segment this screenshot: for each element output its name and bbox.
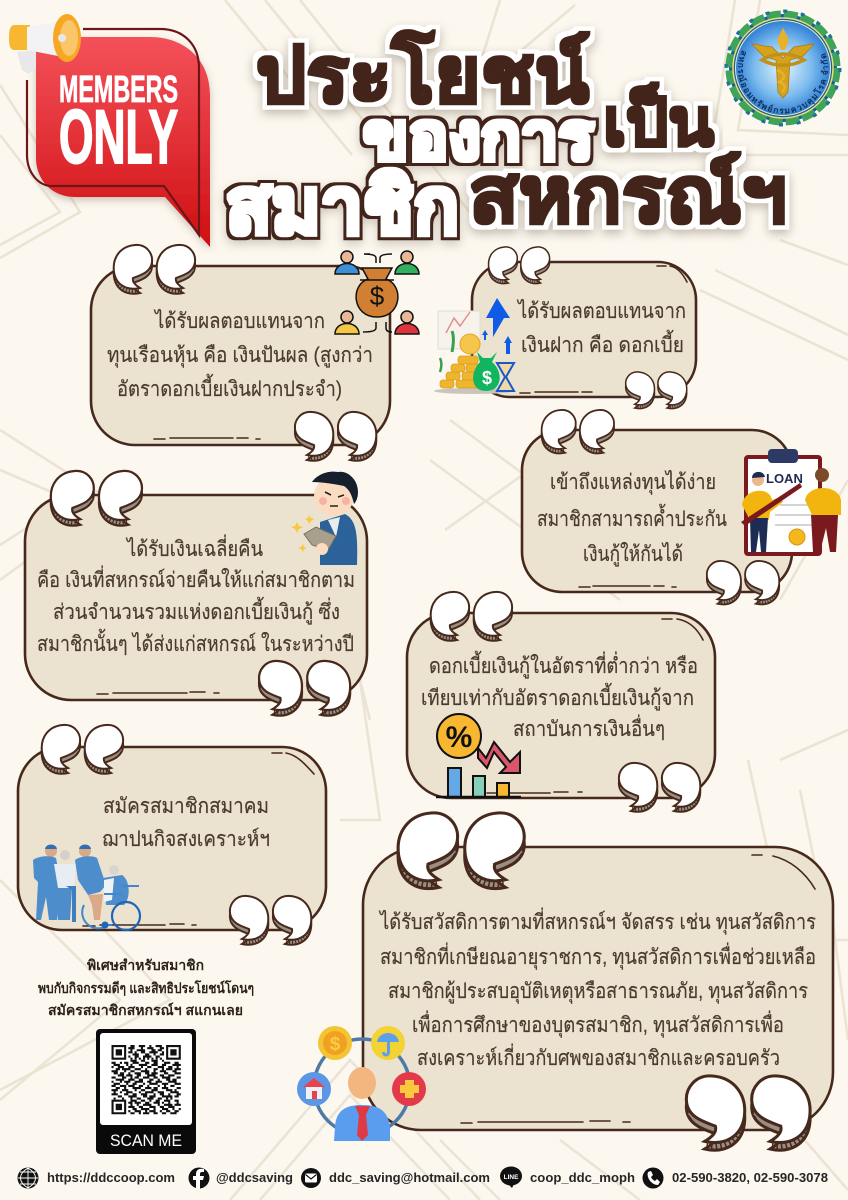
text — [537, 470, 727, 567]
panel: funeral welfare association — [18, 725, 326, 945]
badge: members only: ONLY — [59, 95, 178, 180]
quote open — [542, 410, 614, 453]
website: https://ddccoop.com — [47, 1170, 175, 1185]
icon: money bag with people — [335, 251, 419, 334]
text: member invitation: สมัครสมาชิกสหกรณ์ฯ สแกนเลย — [48, 1002, 243, 1018]
panel: lower loan interest — [407, 592, 715, 812]
footer: contact bar — [18, 1166, 828, 1189]
icon: man with money — [291, 472, 358, 565]
panel: deposit interest — [434, 247, 696, 409]
quote close — [686, 1076, 810, 1150]
text: ได้รับผลตอบแทนจาก — [516, 299, 686, 323]
text: ส่วนจำนวนรวมแห่งดอกเบี้ยเงินกู้ ซึ่ง — [53, 597, 340, 625]
icon: globe — [18, 1168, 38, 1188]
text — [107, 309, 373, 401]
logo: cooperative seal: สหกรณ์ออมทรัพย์กรมควบคุมโรค จำกัด — [738, 50, 828, 114]
icon: line — [500, 1166, 522, 1188]
text: ทุนเรือนหุ้น คือ เงินปันผล (สูงกว่า — [107, 344, 373, 368]
text: member invitation: พบกับกิจกรรมดีๆ และสิทธิประโยชน์โดนๆ — [38, 979, 254, 996]
text — [378, 907, 816, 1070]
text: ได้รับผลตอบแทนจาก — [153, 309, 325, 333]
text: ได้รับเงินเฉลี่ยคืน — [125, 534, 263, 561]
text — [102, 795, 270, 851]
text: member invitation — [38, 957, 254, 1018]
text: สมัครสมาชิกสมาคม — [103, 795, 269, 818]
facebook handle: @ddcsaving — [216, 1170, 293, 1185]
icon: falling interest chart: % — [446, 721, 472, 754]
icon: line: LINE — [504, 1174, 519, 1181]
icon: loan clipboard — [741, 449, 841, 554]
icon: mail — [301, 1168, 321, 1188]
text: สมาชิกสามารถค้ำประกัน — [537, 504, 727, 531]
text: คือ เงินที่สหกรณ์จ่ายคืนให้แก่สมาชิกตาม — [37, 565, 355, 592]
icon: member welfare circle — [297, 1026, 426, 1141]
text: เงินฝาก คือ ดอกเบี้ย — [521, 330, 684, 357]
quote close — [295, 412, 376, 461]
title — [226, 29, 787, 250]
quote close — [259, 661, 350, 716]
title: สหกรณ์ฯ — [469, 151, 787, 239]
quote open — [51, 471, 142, 526]
text: เงินกู้ให้กันได้ — [583, 542, 683, 567]
text — [516, 299, 686, 357]
icon: falling interest chart — [436, 714, 521, 797]
text: member invitation: พิเศษสำหรับสมาชิก — [87, 957, 204, 973]
text: สงเคราะห์เกี่ยวกับศพของสมาชิกและครอบครัว — [417, 1043, 780, 1070]
panel: dividend benefit — [91, 245, 419, 461]
icon: savings growth — [434, 298, 514, 394]
icon: facebook — [188, 1168, 210, 1189]
text: อัตราดอกเบี้ยเงินฝากประจำ) — [117, 374, 342, 401]
icon: nurses and patient — [33, 844, 140, 930]
QR code — [96, 1029, 196, 1154]
title: ประโยชน์ — [256, 29, 590, 119]
phone numbers: 02-590-3820, 02-590-3078 — [672, 1170, 828, 1185]
title: สมาชิก — [226, 162, 459, 250]
icon: money bag with people: $ — [370, 281, 385, 311]
text — [37, 534, 355, 656]
email: ddc_saving@hotmail.com — [329, 1170, 490, 1185]
text: ฌาปนกิจสงเคราะห์ฯ — [102, 827, 270, 851]
title: ของการ — [363, 99, 594, 173]
badge: members only — [9, 14, 210, 247]
logo: cooperative seal — [724, 10, 842, 126]
panel: welfare benefits — [363, 813, 833, 1150]
panel: easy access to funds — [522, 410, 841, 604]
panel: average return — [25, 471, 367, 716]
text: เทียบเท่ากับอัตราดอกเบี้ยเงินกู้จาก — [421, 683, 694, 711]
quote open — [114, 245, 195, 294]
text: ดอกเบี้ยเงินกู้ในอัตราที่ต่ำกว่า หรือ — [429, 651, 698, 679]
icon: megaphone — [9, 14, 81, 74]
quote close — [230, 896, 311, 945]
text: เพื่อการศึกษาของบุตรสมาชิก, ทุนสวัสดิการเพื่อ — [412, 1010, 784, 1038]
text: สมาชิกนั้นๆ ได้ส่งแก่สหกรณ์ ในระหว่างปี — [37, 629, 354, 656]
quote close — [619, 763, 700, 812]
quote open — [431, 592, 512, 641]
icon: loan clipboard: LOAN — [766, 471, 803, 486]
quote open — [398, 813, 524, 889]
badge: members only: MEMBERS — [59, 69, 178, 111]
text — [421, 651, 698, 741]
icon: member welfare circle: $ — [330, 1034, 341, 1055]
title: เป็น — [603, 82, 714, 159]
text: เข้าถึงแหล่งทุนได้ง่าย — [550, 470, 716, 495]
QR code: SCAN ME — [110, 1131, 182, 1150]
quote open — [42, 725, 123, 774]
quote close — [626, 372, 687, 409]
icon: phone — [642, 1168, 664, 1188]
icon: savings growth: $ — [482, 368, 492, 388]
quote close — [707, 561, 779, 604]
text: สถาบันการเงินอื่นๆ — [513, 714, 665, 741]
line id: coop_ddc_moph — [530, 1170, 635, 1185]
quote open — [489, 247, 550, 284]
